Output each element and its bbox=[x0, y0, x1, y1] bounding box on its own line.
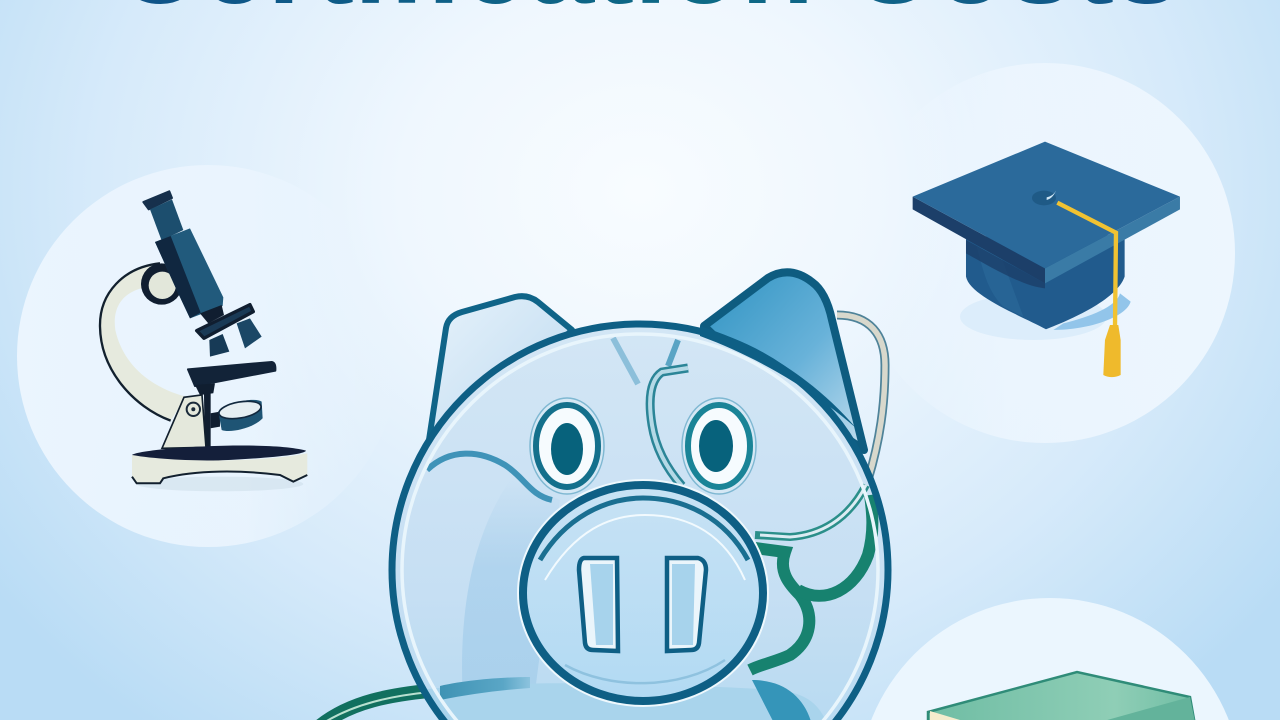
left ear bbox=[429, 296, 572, 440]
left eye bbox=[530, 398, 604, 494]
stethoscope tube: lower left bbox=[320, 690, 440, 720]
icon: book bbox=[928, 672, 1195, 720]
icon: microscope bbox=[100, 191, 307, 491]
stethoscope inside lens bbox=[650, 368, 872, 670]
left nostril bbox=[579, 558, 618, 651]
panel: book circle bbox=[858, 598, 1242, 720]
right eye bbox=[682, 398, 756, 494]
head lens bbox=[392, 324, 888, 720]
panel: graduation cap circle bbox=[855, 63, 1235, 443]
snout bbox=[517, 479, 769, 707]
right ear bbox=[704, 272, 864, 450]
right nostril bbox=[667, 558, 706, 651]
stethoscope tube: grey behind pig bbox=[837, 315, 885, 480]
illustration: piggy bank with stethoscope bbox=[320, 272, 888, 720]
panel: microscope circle bbox=[17, 165, 399, 547]
icon: graduation cap bbox=[913, 142, 1180, 377]
